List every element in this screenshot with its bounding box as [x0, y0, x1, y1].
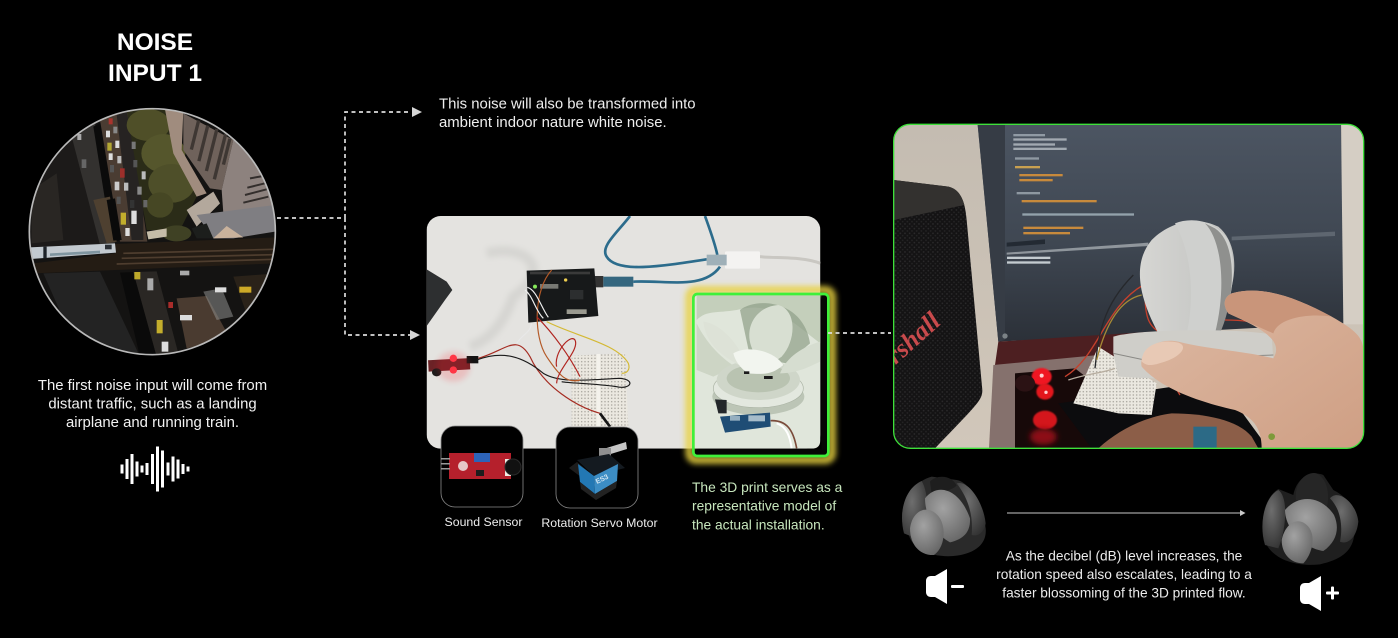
laptop base	[995, 332, 1142, 365]
arduino	[527, 268, 598, 323]
text: ambient noise note: This noise will also be transformed into	[439, 96, 696, 112]
3D printed bud	[1140, 221, 1234, 333]
highlight glow	[689, 290, 832, 460]
inset: 3D print close-up	[695, 296, 820, 449]
card: servo motor	[556, 427, 638, 508]
text: 3D print caption: the actual installation.	[692, 518, 825, 532]
fingers and palm	[1141, 291, 1364, 448]
icon: sound waveform	[120, 446, 190, 492]
title	[108, 29, 202, 87]
wires	[477, 270, 630, 427]
title: NOISE	[117, 29, 193, 56]
code lines	[1007, 134, 1335, 264]
text: ambient noise note: ambient indoor nature white noise.	[439, 115, 667, 131]
description: first noise input: The first noise input will come from	[38, 378, 267, 394]
labels: components: Rotation Servo Motor	[541, 516, 658, 530]
dashed connector: to hand photo	[828, 332, 891, 334]
aerial traffic photo circle	[27, 107, 280, 357]
icon: volume down	[926, 569, 964, 604]
text: 3D print caption	[692, 480, 843, 532]
wires	[1064, 274, 1246, 396]
icon: dark object at edge	[427, 269, 452, 326]
text: 3D print caption: representative model of	[692, 498, 836, 514]
text: ambient noise note	[439, 96, 696, 131]
arrow: decibel increase	[1007, 510, 1246, 516]
arrow: to ambient noise text	[412, 107, 422, 117]
icon: open 3D flower	[1262, 473, 1358, 565]
icon: volume up	[1300, 576, 1339, 611]
text: decibel explanation	[996, 548, 1252, 600]
panel: circuit photo	[427, 216, 832, 460]
text: decibel explanation: faster blossoming of the 3D printed flow.	[1002, 586, 1246, 600]
breadboard	[572, 353, 628, 427]
labels: components: Sound Sensor	[445, 515, 522, 529]
speaker	[894, 180, 982, 448]
description: first noise input: distant traffic, such as a landing	[48, 396, 257, 412]
text: decibel explanation: rotation speed also escalates, leading to a	[996, 567, 1252, 582]
icon: closed 3D flower	[902, 477, 986, 556]
red LEDs	[1032, 368, 1052, 385]
dashed connector: from circle to both branches	[277, 112, 411, 335]
text: 3D print caption: The 3D print serves as a	[692, 480, 843, 495]
base	[1113, 330, 1273, 383]
breadboard	[1073, 347, 1157, 415]
text: decibel explanation: As the decibel (dB) level increases, the	[1006, 548, 1242, 564]
sensor	[428, 358, 470, 372]
speaker logo: rshall	[880, 306, 946, 369]
labels: components	[445, 515, 658, 530]
highlight frame	[693, 294, 828, 456]
usb cables	[605, 216, 720, 282]
card: sound sensor	[441, 426, 523, 507]
title: INPUT 1	[108, 60, 202, 87]
arrow: to circuit photo	[410, 330, 420, 340]
panel: hand holding 3D print photo	[880, 124, 1365, 448]
laptop screen	[978, 125, 1343, 342]
icon: servo motor: ES3	[595, 474, 610, 486]
description: first noise input: airplane and running train.	[66, 415, 239, 431]
icon: sound sensor module	[441, 453, 521, 479]
description: first noise input	[38, 378, 267, 431]
